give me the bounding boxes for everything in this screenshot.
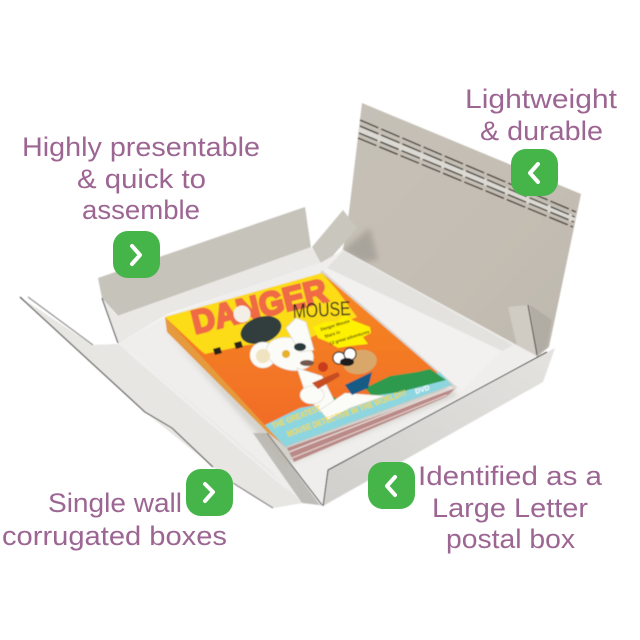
back right panel [312, 103, 581, 357]
icon: left chevron button [368, 462, 415, 509]
label text: assemble [82, 195, 200, 225]
box photo [20, 103, 581, 508]
title: MOUSE [292, 298, 351, 323]
label text: Single wall [48, 488, 182, 518]
DVD cover: Danger Mouse [320, 318, 351, 332]
label text: Identified as a [418, 461, 603, 491]
Penfold character [333, 347, 379, 395]
label text: Lightweight [465, 84, 618, 114]
burst [313, 314, 371, 348]
label text [465, 84, 618, 146]
label text: & durable [480, 116, 603, 146]
DVD cover: 12 great adventures [329, 329, 370, 346]
label text: Large Letter [432, 493, 588, 523]
penfold bomb [237, 311, 285, 349]
right front flap [267, 348, 555, 506]
DVD cover [165, 271, 452, 447]
DVD case [165, 270, 458, 465]
label text [2, 488, 227, 551]
DVD stack [165, 270, 458, 462]
back left flap [98, 207, 322, 344]
label text [22, 132, 260, 225]
title: DANGER [188, 271, 331, 341]
box floor [93, 250, 537, 508]
label text: Highly presentable [22, 132, 260, 162]
DVD cover: DVD [414, 385, 431, 396]
perforated tear strip [358, 120, 576, 227]
label text [418, 461, 603, 554]
tagline [270, 387, 408, 439]
callout: highly presentable [22, 132, 260, 278]
DVD cover: Stars in [324, 329, 341, 339]
label text: corrugated boxes [2, 521, 227, 551]
left flap [20, 297, 302, 508]
tagline: MOUSE DETECTIVE IN THE WORLD!!! [285, 387, 408, 439]
DVD shadow [165, 330, 458, 465]
hill [365, 369, 446, 396]
front grey strip [253, 433, 320, 505]
label text: & quick to [77, 164, 206, 194]
inner folds [93, 251, 513, 508]
icon: right chevron button [113, 231, 160, 278]
teal band [265, 372, 452, 447]
icon: left chevron button [511, 149, 558, 196]
icon: right chevron button [186, 469, 233, 516]
label text: postal box [446, 524, 576, 554]
callout: lightweight and durable [465, 84, 618, 196]
tagline: THE GREATEST [270, 403, 323, 431]
callout: single wall [2, 469, 233, 551]
callout: large letter [368, 461, 603, 554]
Danger Mouse character [250, 318, 385, 420]
